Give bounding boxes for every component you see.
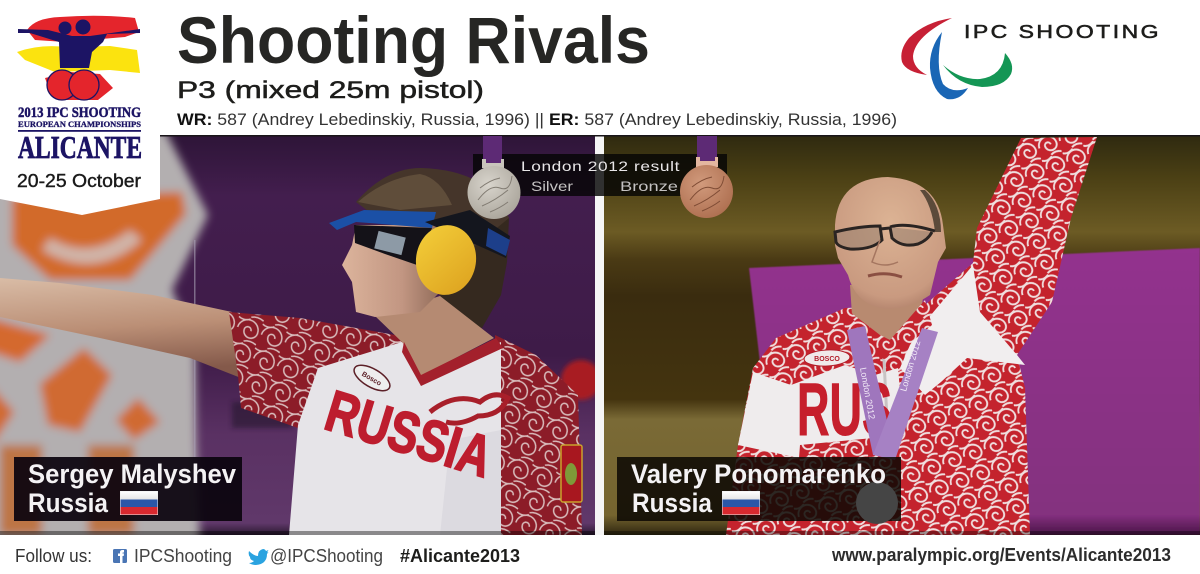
hair back — [440, 218, 509, 328]
follow us label: Follow us: — [15, 546, 92, 566]
display on glasses — [374, 231, 406, 255]
medal in name box — [856, 482, 898, 524]
panel: London 2012 result — [473, 154, 727, 196]
shirt body — [289, 342, 501, 535]
label: London 2012 result: London 2012 result — [521, 158, 680, 174]
sponsor badge — [353, 364, 391, 392]
jacket lettering: RUS — [797, 368, 892, 451]
icon: blue agito — [930, 32, 968, 99]
jacket badge — [804, 349, 850, 367]
medal ribbon: London 2012 — [858, 367, 877, 420]
visor — [329, 210, 436, 230]
records line: WR: 587 (Andrey Lebedinskiy, Russia, 1996) || ER: 587 (Andrey Lebedinskiy, Russia, 1996) — [177, 111, 897, 129]
right photo: Valery Ponomarenko — [604, 136, 1200, 535]
label: Silver: Silver — [531, 179, 574, 194]
purple backdrop panel — [749, 248, 1200, 535]
medal ribbon: London 2012 — [898, 339, 922, 393]
icon: Russian flag — [120, 491, 158, 515]
white divider — [595, 136, 604, 535]
icon: twitter — [249, 549, 268, 565]
swirl on lettering — [430, 395, 508, 423]
mouth and nose — [868, 274, 902, 277]
white banner with event logo — [0, 0, 160, 215]
lower vignette — [604, 531, 1200, 535]
label: Bronze: Bronze — [620, 179, 678, 194]
blurred target backdrop — [0, 130, 208, 545]
top rule — [160, 135, 1200, 136]
event name: 2013 IPC SHOOTING — [18, 105, 141, 121]
jacket — [726, 137, 1097, 535]
website url: www.paralympic.org/Events/Alicante2013 — [831, 545, 1171, 565]
name box: Valery Ponomarenko — [617, 457, 901, 524]
name box: Sergey Malyshev — [14, 457, 242, 521]
footer — [15, 545, 1171, 566]
collar — [852, 300, 932, 360]
sunglasses frame — [354, 225, 432, 265]
athlete country: Russia — [632, 488, 713, 518]
lower vignette — [0, 531, 595, 535]
right sleeve — [495, 335, 582, 535]
shirt lettering: RUSSIA — [318, 378, 500, 490]
logo text: IPC SHOOTING — [964, 21, 1161, 42]
icon: silver medal — [468, 136, 520, 219]
jacket badge: BOSCO — [814, 356, 840, 363]
icon: facebook — [113, 549, 127, 563]
white chest — [738, 365, 904, 458]
head — [835, 177, 946, 309]
glasses — [835, 225, 935, 249]
athlete name: Sergey Malyshev — [28, 459, 236, 489]
icon: Russian flag — [722, 491, 760, 515]
neck — [375, 296, 494, 376]
facebook handle: IPCShooting — [134, 546, 232, 566]
neck — [850, 285, 923, 340]
arm — [0, 278, 241, 378]
IPC Shooting logo — [901, 18, 1161, 99]
left photo: Sergey Malyshev — [0, 130, 601, 545]
icon: red agito — [901, 18, 952, 75]
ear muff — [416, 225, 476, 295]
icon: green agito — [943, 53, 1012, 87]
face — [342, 225, 442, 317]
white shoulder — [900, 265, 1025, 395]
left sleeve — [229, 312, 415, 428]
icon: bronze medal — [680, 136, 733, 218]
chest zip — [882, 358, 888, 410]
head strap — [425, 210, 510, 258]
shirt collar — [402, 338, 503, 386]
hashtag: #Alicante2013 — [400, 546, 520, 566]
medal ribbon — [847, 326, 938, 460]
icon: Spanish flag shooters — [17, 16, 140, 100]
athlete country: Russia — [28, 488, 109, 518]
title: Shooting Rivals — [177, 3, 650, 77]
event city: ALICANTE — [18, 129, 142, 165]
event dates: 20-25 October — [17, 171, 141, 191]
arm patch — [561, 445, 582, 502]
subtitle: P3 (mixed 25m pistol) — [177, 77, 484, 104]
hair — [356, 168, 509, 250]
sponsor badge: Bosco — [360, 371, 382, 388]
athlete name: Valery Ponomarenko — [631, 459, 886, 489]
twitter handle: @IPCShooting — [270, 546, 383, 566]
event subtitle: EUROPEAN CHAMPIONSHIPS — [18, 120, 142, 129]
